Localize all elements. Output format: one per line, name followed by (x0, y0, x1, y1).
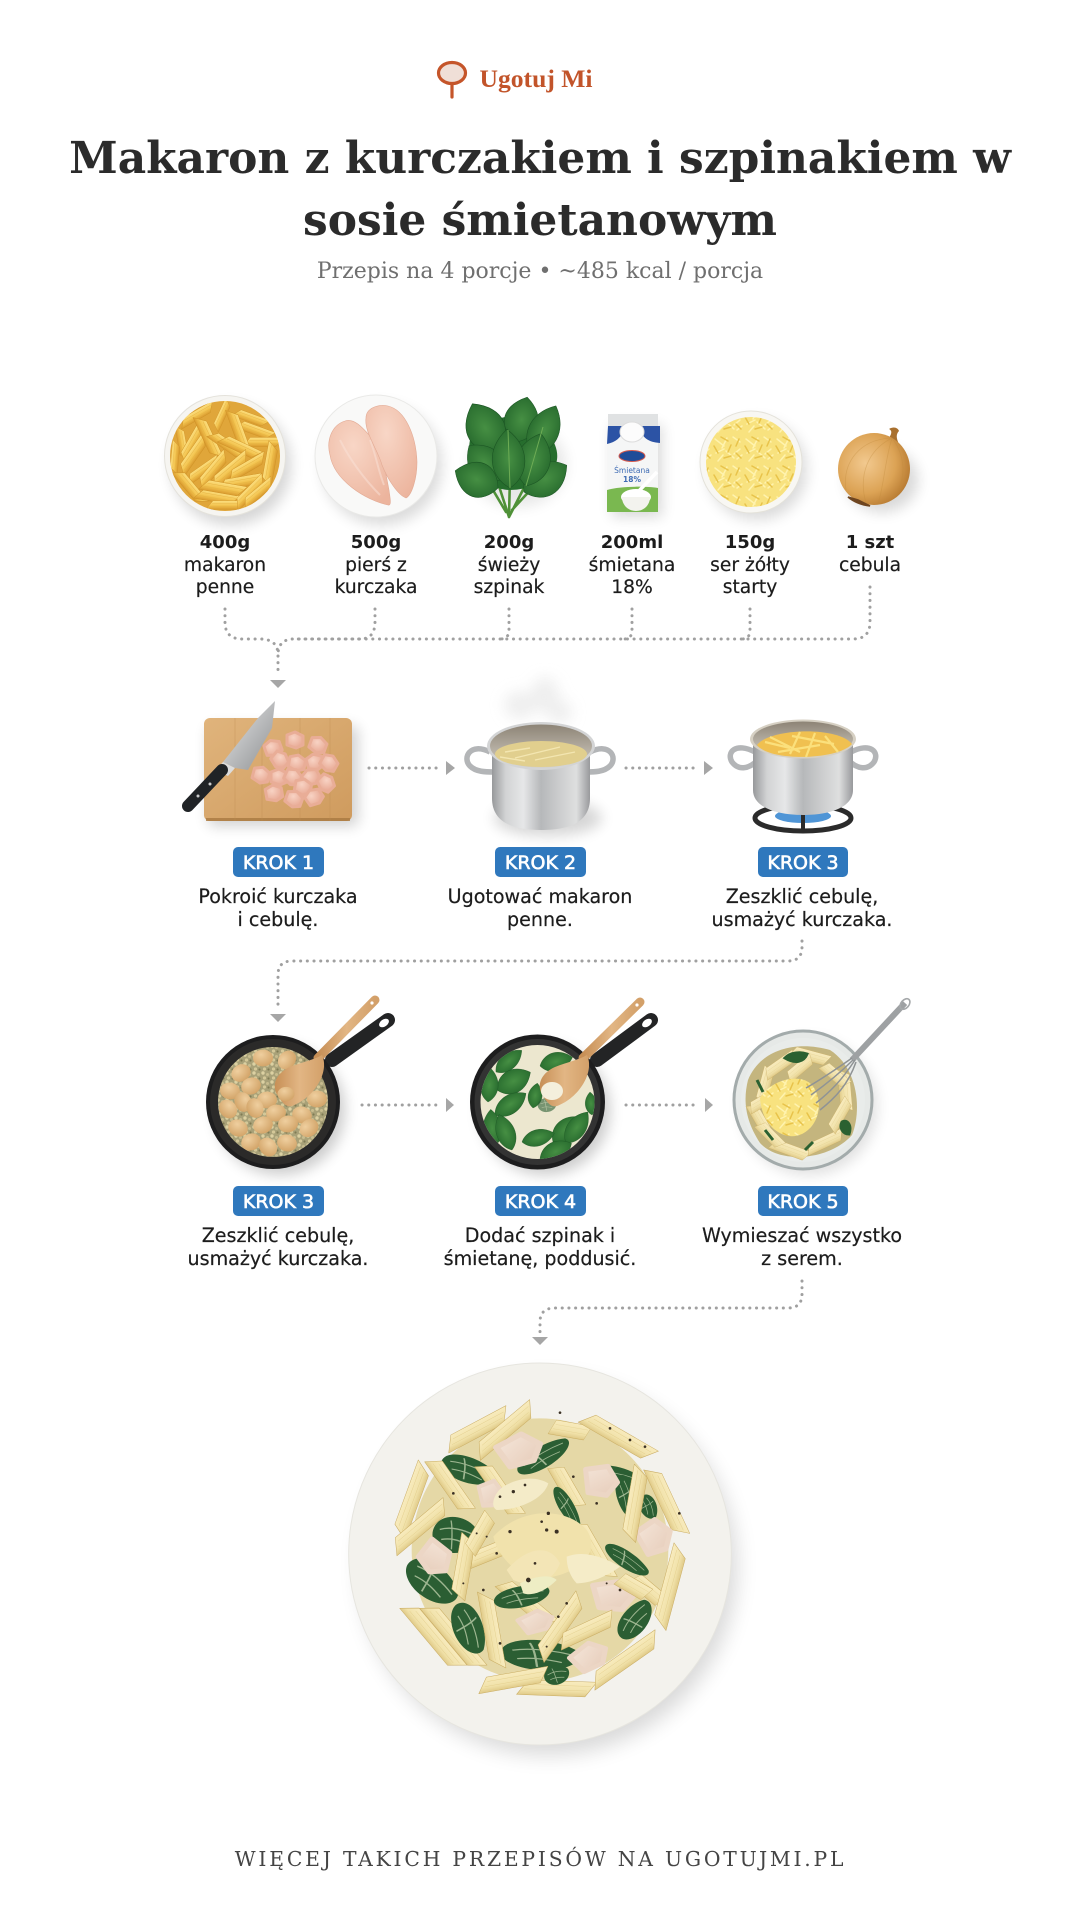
ingredient: spinach (449, 393, 576, 598)
label (474, 532, 545, 598)
badge (233, 847, 324, 877)
badge (495, 1186, 586, 1216)
description (702, 1224, 902, 1270)
arrow: step 1 to 2 (369, 761, 455, 775)
step 1 (188, 701, 358, 931)
title: sosie śmietanowym (303, 195, 777, 246)
icon: spinach bunch (449, 393, 576, 517)
icon: pot on burner (730, 720, 876, 831)
label (839, 532, 901, 576)
description: i cebulę. (238, 908, 318, 931)
description: penne. (507, 908, 573, 931)
label: 1 szt (846, 532, 895, 553)
description: Dodać szpinak i (465, 1224, 615, 1247)
subtitle: Przepis na 4 porcje • ~485 kcal / porcja (317, 259, 763, 284)
label: makaron (184, 555, 266, 576)
arrow: step 4 to 5 (626, 1098, 713, 1112)
step 5 (702, 997, 912, 1270)
badge: KROK 3 (243, 1191, 314, 1213)
badge: KROK 1 (243, 852, 314, 874)
description: Zeszklić cebulę, (726, 885, 878, 908)
step 4 (444, 1002, 654, 1270)
icon: bowl of penne (164, 396, 291, 525)
black pepper (452, 1411, 681, 1648)
badge: KROK 5 (767, 1191, 839, 1213)
description: usmażyć kurczaka. (188, 1247, 368, 1270)
description (448, 885, 632, 931)
label: śmietana (589, 555, 675, 576)
description (188, 1224, 368, 1270)
icon: plate with chicken breasts (315, 395, 442, 525)
icon: spoon (438, 62, 466, 97)
description: Ugotować makaron (448, 885, 632, 908)
label: cebula (839, 555, 901, 576)
label: penne (196, 577, 254, 598)
icon: cream carton: Śmietana (614, 466, 650, 475)
icon: onion (838, 428, 918, 512)
badge (758, 847, 848, 877)
label: pierś z (345, 555, 407, 576)
icon: pan with chicken (206, 1000, 391, 1175)
icon: pot with penne (467, 722, 613, 836)
badge: KROK 3 (767, 852, 839, 874)
label (335, 532, 417, 598)
description: usmażyć kurczaka. (712, 908, 892, 931)
label: ser żółty (710, 555, 790, 576)
ingredient: chicken (315, 395, 442, 598)
label (184, 532, 266, 598)
icon: steam (504, 677, 572, 724)
final dish (349, 1363, 737, 1755)
step 3 top (712, 720, 892, 931)
footer: WIĘCEJ TAKICH PRZEPISÓW NA UGOTUJMI.PL (235, 1846, 846, 1871)
badge (233, 1186, 324, 1216)
label: 400g (200, 532, 250, 553)
ingredient: cream (589, 414, 675, 598)
badge (758, 1186, 848, 1216)
label: 200ml (601, 532, 663, 553)
arrow: step 5 to final dish (532, 1281, 802, 1345)
icon: glass bowl with pasta, cheese and whisk (734, 997, 912, 1175)
label: starty (723, 577, 777, 598)
label: kurczaka (335, 577, 417, 598)
description: Pokroić kurczaka (198, 885, 358, 908)
description: śmietanę, poddusić. (444, 1247, 636, 1270)
description: Zeszklić cebulę, (202, 1224, 354, 1247)
arrow: ingredients to step 1 (225, 587, 870, 688)
description (712, 885, 892, 931)
label: szpinak (474, 577, 545, 598)
icon: cream carton (607, 414, 662, 517)
logo (438, 62, 593, 97)
description (444, 1224, 636, 1270)
label: 200g (484, 532, 534, 553)
icon: cutting board with knife and chicken (188, 701, 358, 826)
arrow: step 3 to second row (270, 941, 802, 1022)
badge: KROK 2 (505, 852, 576, 874)
ingredient: penne (164, 396, 291, 598)
icon: cream carton: 18% (623, 475, 641, 484)
arrow: step 2 to 3 (626, 761, 713, 775)
badge: KROK 4 (505, 1191, 576, 1213)
label: 18% (611, 577, 653, 598)
ingredient: cheese (700, 411, 807, 598)
panel: ingredients (164, 393, 918, 598)
label (589, 532, 675, 598)
description: Wymieszać wszystko (702, 1224, 902, 1247)
step 2 (448, 677, 632, 931)
title: Makaron z kurczakiem i szpinakiem w (69, 133, 1012, 184)
pasta with spinach and chicken (387, 1400, 690, 1697)
label (710, 532, 790, 598)
icon: bowl of grated cheese (700, 411, 807, 520)
icon: pan with spinach sauce (470, 1002, 654, 1175)
description: z serem. (761, 1247, 843, 1270)
ingredient: onion (838, 428, 918, 576)
plate (349, 1363, 737, 1755)
badge (495, 847, 586, 877)
description (198, 885, 358, 931)
arrow: step 3 to 4 (362, 1098, 454, 1112)
logo name: Ugotuj Mi (479, 64, 593, 93)
label: 500g (351, 532, 401, 553)
step 3 bottom (188, 1000, 391, 1270)
label: 150g (725, 532, 775, 553)
label: świeży (478, 555, 540, 576)
